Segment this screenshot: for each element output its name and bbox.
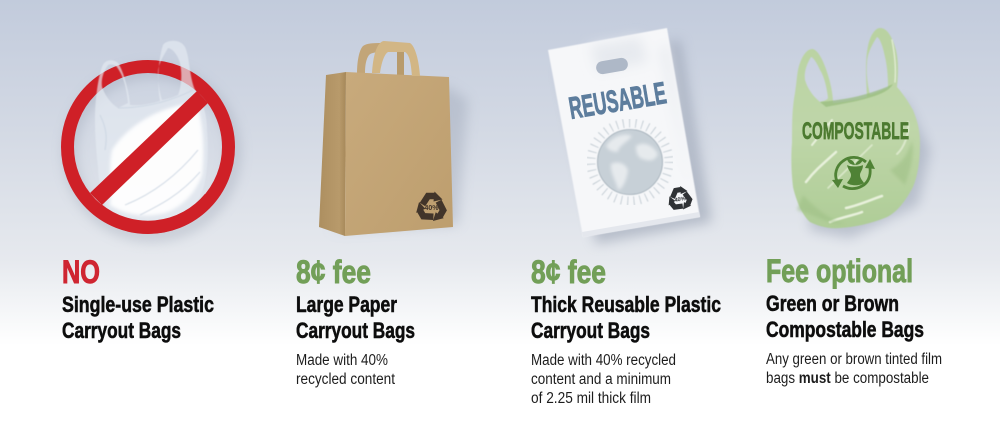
bag bottom edge (582, 212, 700, 237)
detail line 1: Made with 40% (296, 352, 388, 369)
label: REUSABLE: REUSABLE (566, 75, 669, 126)
label: COMPOSTABLE: COMPOSTABLE (802, 118, 909, 145)
subheading: carryout bags: Carryout Bags (62, 318, 181, 343)
subheading: carryout bags: Carryout Bags (296, 318, 415, 343)
front handle (372, 41, 420, 76)
panel: paper bag (319, 41, 468, 236)
subheading: single-use plastic: Single-use Plastic (62, 292, 214, 317)
subheading: carryout bags: Carryout Bags (531, 318, 650, 343)
icon: recycle symbol: 40% (674, 196, 686, 204)
subheading: green or brown: Green or Brown (766, 291, 899, 316)
bag side panel (319, 72, 346, 236)
subheading: large paper: Large Paper (296, 292, 397, 317)
subheading: thick reusable plastic: Thick Reusable Plastic (531, 292, 721, 317)
text column: reusable bag fee (531, 254, 721, 407)
detail line 2: content and a minimum (531, 371, 671, 388)
icon: recycle symbol (663, 184, 694, 215)
icon: translucent plastic bag (95, 41, 208, 221)
icon: recycle symbol 40%: 40% (424, 205, 439, 212)
detail line 3: of 2.25 mil thick film (531, 390, 651, 407)
bag sheen (590, 37, 690, 190)
heading: NO: NO (62, 254, 100, 290)
panel: compostable bag (791, 28, 930, 238)
film highlights (806, 40, 908, 222)
icon: recycle symbol 40% (412, 192, 446, 225)
back handle far strap (397, 50, 404, 75)
detail line 2: recycled content (296, 371, 396, 388)
handle hole (595, 57, 629, 75)
prohibition ring (68, 66, 228, 228)
text column: NO (62, 254, 214, 343)
prohibition ring shadow (70, 71, 234, 235)
panel: reusable plastic bag (548, 28, 712, 244)
icon: globe with rays (591, 123, 669, 201)
text column: paper bag fee (296, 254, 415, 388)
detail line 2: bags must be compostable (766, 370, 929, 387)
heading: 8 cent fee: 8¢ fee (531, 254, 606, 290)
heading: 8 cent fee: 8¢ fee (296, 254, 371, 290)
back handle (357, 43, 384, 73)
compostable bag shadow (810, 100, 930, 238)
subheading: compostable bags: Compostable Bags (766, 317, 924, 342)
paper bag shadow (322, 85, 468, 232)
heading: fee optional: Fee optional (766, 253, 913, 289)
compostable bag body (791, 28, 920, 228)
panel: single-use plastic bag banned (68, 41, 234, 235)
reusable bag body (548, 28, 700, 237)
detail line 1: Made with 40% recycled (531, 352, 676, 369)
darker folds (797, 140, 913, 224)
ring segment over bag bottom (97, 198, 210, 227)
reusable bag shadow (560, 40, 712, 244)
detail line 1: Any green or brown tinted film (766, 351, 942, 368)
icon: apple core compost cycle (832, 157, 875, 189)
prohibition slash (90, 91, 208, 205)
text column: compostable bag fee (766, 253, 942, 387)
bag front panel (345, 72, 453, 236)
